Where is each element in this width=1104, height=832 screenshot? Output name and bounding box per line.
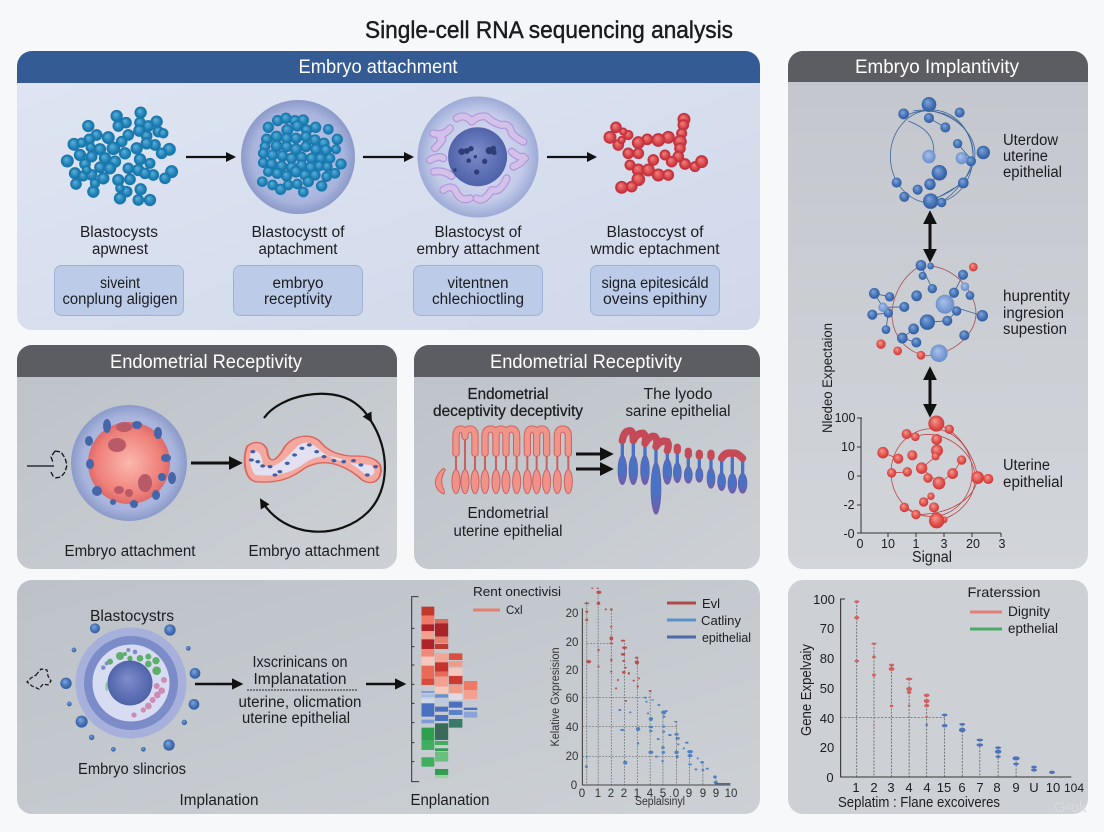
- scatter chart: 2: [608, 788, 614, 800]
- scatter chart: 9: [686, 788, 692, 800]
- text: lower caption: [454, 505, 562, 540]
- text: left villi heading: [433, 386, 583, 420]
- arrow: [195, 683, 241, 685]
- caption: Embryo attachment: [64, 543, 196, 560]
- arrow: [576, 452, 611, 456]
- axes: node expression: [819, 323, 1006, 566]
- scatter legend: Evl: [702, 596, 720, 611]
- callout box 2: receptivity: [264, 291, 332, 308]
- header: embryo attachment: Embryo attachment: [298, 56, 458, 78]
- expression chart: 70: [820, 621, 834, 636]
- arrow: [186, 156, 234, 158]
- icon: blastocyst: [60, 623, 200, 752]
- step label 3: embry attachment: [416, 241, 540, 258]
- step label 1: Blastocysts: [80, 224, 158, 241]
- header: Endometrial Receptivity: [490, 351, 682, 373]
- label: mixed network: [1003, 288, 1070, 338]
- text: embryo label: Embryo slincrios: [78, 761, 186, 778]
- expression chart: 7: [976, 780, 984, 795]
- icon: coloured villi: [618, 431, 747, 514]
- label: blue network: uterine: [1003, 148, 1048, 165]
- label: red network: epithelial: [1003, 474, 1063, 491]
- text: implantation description: uterine epithelial: [242, 710, 350, 727]
- icon: sphere with nucleus and purple ring: [418, 96, 538, 218]
- network: red: [877, 415, 993, 528]
- heatmap: [412, 597, 477, 782]
- chart legend: [968, 584, 1058, 636]
- panel: implantation and expression: [17, 580, 760, 814]
- double arrow: [928, 213, 932, 260]
- expression chart: 3: [887, 780, 895, 795]
- icon: endometrial tube: [245, 436, 381, 483]
- header: Embryo Implantivity: [855, 56, 1019, 78]
- expression chart: 40: [820, 711, 834, 726]
- scatter chart: 20: [566, 751, 578, 763]
- arrow: [576, 468, 611, 470]
- axes: node expression: 10: [841, 440, 855, 454]
- text: right villi heading: The lyodo: [644, 386, 712, 403]
- icon: blue cell cluster: [62, 107, 177, 205]
- scatter chart: 20: [566, 665, 578, 677]
- callout box 3: vitentnen: [448, 275, 508, 292]
- chart legend: Fraterssion: [968, 584, 1040, 600]
- scatter legend: Catliny: [701, 613, 741, 628]
- axes: node expression: 0: [848, 469, 855, 483]
- axes: node expression: Signal: [912, 549, 952, 566]
- header: [788, 51, 1088, 82]
- text: right villi heading: [626, 386, 730, 420]
- step label 3: Blastocyst of: [434, 224, 522, 241]
- scatter chart: Kelative Gxpresision: [550, 648, 562, 746]
- label: blue network: Uterdow: [1003, 132, 1059, 149]
- scatter chart: 1: [595, 788, 601, 800]
- expression chart: 20: [820, 740, 834, 755]
- callout box 2: embryo: [272, 275, 324, 292]
- expression chart: [799, 592, 1084, 811]
- axes: node expression: 100: [835, 411, 855, 425]
- scatter chart: 60: [566, 693, 578, 705]
- caption: implanation: Implanation: [180, 792, 258, 809]
- panel: gene expression chart: [788, 580, 1088, 816]
- text: implantation description: [238, 654, 362, 727]
- step label 2: Blastocystt of: [252, 224, 345, 241]
- caption: enplanation: Enplanation: [410, 792, 490, 809]
- callout box 4: [590, 266, 720, 316]
- axes: node expression: 1: [913, 537, 920, 551]
- heatmap legend: [473, 584, 561, 617]
- scatter chart: 20: [566, 608, 578, 620]
- cycle arrow upper: [264, 394, 371, 421]
- expression chart: 15: [937, 780, 951, 795]
- double arrow: [928, 369, 932, 415]
- network: mixed: [867, 260, 988, 362]
- expression chart: 100: [813, 592, 835, 607]
- label: mixed network: ingresion: [1003, 305, 1064, 322]
- icon: red cell chain: [604, 114, 707, 193]
- expression chart: 50: [820, 681, 834, 696]
- step label 1: apwnest: [92, 241, 149, 258]
- step label 4: [590, 224, 720, 258]
- panel: embryo attachment: [17, 51, 760, 330]
- axes: node expression: -2: [843, 498, 855, 512]
- callout box 4: oveins epithiny: [603, 291, 707, 308]
- expression chart: 4: [905, 780, 913, 795]
- step label 3: [416, 224, 540, 258]
- network: blue: [890, 97, 990, 209]
- expression chart: U: [1029, 780, 1039, 795]
- caption: Embryo attachment: [248, 543, 380, 560]
- label: mixed network: huprentity: [1003, 288, 1070, 305]
- heatmap legend: Rent onectivisi: [473, 584, 561, 599]
- scatter chart: 0: [579, 788, 585, 800]
- scatter legend: [667, 596, 751, 645]
- label: red network: [1003, 457, 1063, 491]
- step label 2: [252, 224, 345, 258]
- panel: endometrial receptivity left: [17, 345, 397, 569]
- callout box 2: [234, 266, 362, 316]
- step label 4: wmdic eptachment: [590, 241, 720, 258]
- step label 4: Blastoccyst of: [606, 224, 704, 241]
- watermark: Grok: [1054, 799, 1087, 816]
- scatter chart: 4: [647, 788, 654, 800]
- icon: salmon villi: [435, 429, 572, 494]
- text: right villi heading: sarine epithelial: [626, 403, 730, 420]
- axes: node expression: 10: [881, 537, 895, 551]
- scatter chart: 2: [621, 788, 627, 800]
- axes: node expression: 20: [966, 537, 980, 551]
- header: Endometrial Receptivity: [110, 351, 302, 373]
- arrow: [191, 462, 240, 464]
- scatter chart: 20: [566, 637, 578, 649]
- expression chart: 0: [826, 770, 834, 785]
- axes: node expression: 3: [999, 537, 1006, 551]
- chart legend: epthelial: [1008, 621, 1058, 636]
- header: [17, 345, 397, 377]
- label: blue network: [1003, 132, 1062, 181]
- header: [414, 345, 760, 377]
- expression chart: 80: [820, 651, 834, 666]
- arrow: [366, 683, 404, 685]
- callout box 1: conplung aligigen: [62, 291, 178, 308]
- scatter chart: 9: [700, 788, 706, 800]
- scatter chart: 0: [673, 788, 679, 800]
- header: embryo attachment: [17, 51, 760, 83]
- scatter chart: Seplalsinyl: [635, 796, 685, 808]
- panel: endometrial receptivity right: [414, 345, 760, 569]
- scatter chart: 40: [566, 722, 578, 734]
- expression chart: 1: [852, 780, 860, 795]
- chart legend: Dignity: [1008, 604, 1050, 619]
- expression chart: 10: [1046, 780, 1060, 795]
- panel: embryo implantivity: [788, 51, 1088, 569]
- scatter chart: 1: [634, 788, 640, 800]
- text: blastocyst label: Blastocystrs: [90, 608, 174, 625]
- expression chart: Seplatim : Flane excoiveres: [838, 795, 1000, 811]
- expression chart: 9: [1012, 780, 1020, 795]
- axes: node expression: 0: [857, 537, 864, 551]
- axes: node expression: -0: [843, 527, 855, 541]
- expression chart: Gene Expelvaiy: [799, 643, 815, 736]
- scatter chart: 10: [725, 788, 737, 800]
- text: left villi heading: Endometrial: [468, 386, 548, 403]
- scatter chart: 9: [713, 788, 719, 800]
- label: blue network: epithelial: [1003, 164, 1062, 181]
- callout box 3: chlechioctling: [432, 291, 524, 308]
- heatmap legend: Cxl: [506, 605, 523, 617]
- text: lower caption: uterine epithelial: [454, 523, 562, 540]
- icon: dashed cell with entry arrow: [27, 451, 67, 478]
- callout box 1: [54, 266, 184, 316]
- axes: node expression: 3: [941, 537, 948, 551]
- expression chart: 8: [993, 780, 1001, 795]
- expression chart: 4: [923, 780, 931, 795]
- callout box 1: siveint: [100, 275, 141, 292]
- scatter chart: 0: [571, 780, 577, 792]
- arrow: [363, 156, 412, 158]
- cycle arrow lower: [261, 421, 385, 532]
- scatter chart: 5: [660, 788, 666, 800]
- text: implantation description: uterine, olicmation: [238, 694, 362, 711]
- text: implantation description: Ixscrinicans on: [252, 654, 348, 671]
- arrow: [547, 156, 595, 158]
- expression chart: 104: [1064, 781, 1084, 795]
- text: left villi heading: deceptivity deceptivity: [433, 403, 583, 420]
- title: Single-cell RNA sequencing analysis: [365, 17, 733, 44]
- callout box 3: [414, 266, 542, 316]
- text: lower caption: Endometrial: [468, 505, 548, 522]
- scatter legend: epithelial: [702, 630, 751, 645]
- label: red network: Uterine: [1003, 457, 1050, 474]
- label: mixed network: supestion: [1003, 321, 1067, 338]
- step label 2: aptachment: [258, 241, 338, 258]
- expression chart: 6: [958, 780, 966, 795]
- icon: red sphere with receptors: [71, 405, 187, 521]
- icon: dashed cell: [27, 669, 51, 689]
- expression chart: 2: [870, 780, 878, 795]
- axes: node expression: Nledeo Expectaion: [819, 323, 835, 433]
- icon: sphere with blue cells: [241, 100, 355, 214]
- text: implantation description: Implanatation: [254, 671, 346, 688]
- scatter chart: [550, 588, 737, 808]
- callout box 4: signa epitesicáld: [602, 275, 708, 292]
- step label 1: [80, 224, 158, 258]
